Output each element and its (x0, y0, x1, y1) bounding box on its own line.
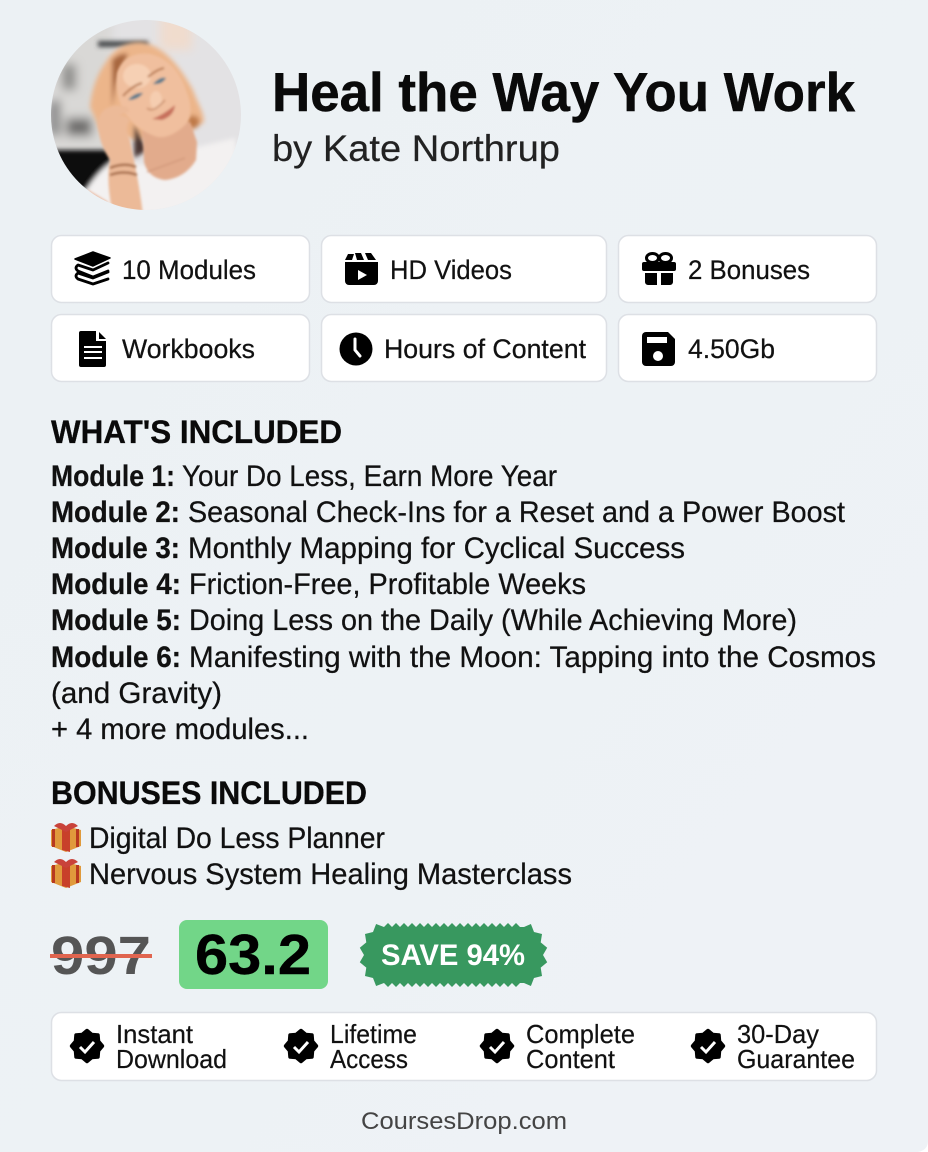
heading: what's included: WHAT'S INCLUDED (51, 414, 342, 450)
hair (90, 42, 204, 158)
guarantee: 30-day guarantee: 30-Day (737, 1019, 819, 1049)
module list: Module 2: (51, 496, 180, 529)
module list: Module 4: (51, 568, 181, 601)
footer site name: CoursesDrop.com (361, 1108, 567, 1135)
new price: 63.2 (195, 923, 311, 987)
module list: Monthly Mapping for Cyclical Success (188, 532, 685, 565)
portrait photo (50, 15, 245, 215)
heading: bonuses included: BONUSES INCLUDED (51, 775, 367, 811)
guarantee: complete content: Complete (526, 1019, 635, 1049)
module list: Module 3: (51, 532, 180, 565)
guarantee: lifetime access (286, 1019, 417, 1074)
guarantee: instant download: Instant (116, 1019, 194, 1049)
guarantee: instant download: Download (116, 1044, 227, 1074)
guarantee bar (52, 1012, 876, 1080)
module list: Seasonal Check-Ins for a Reset and a Power Boost (188, 496, 846, 529)
module list: Module 5: (51, 604, 181, 637)
feature card: workbooks (52, 314, 310, 382)
guarantee: 30-day guarantee: Guarantee (737, 1044, 855, 1074)
module list: Doing Less on the Daily (While Achieving More) (189, 604, 797, 637)
guarantee: complete content: Content (526, 1044, 616, 1074)
bonus 2: Nervous System Healing Masterclass (89, 858, 572, 891)
module list: Manifesting with the Moon: Tapping into the Cosmos (189, 641, 876, 674)
feature card: workbooks: Workbooks (122, 334, 255, 364)
module list: + 4 more modules... (51, 713, 309, 746)
module list: Module 1: (51, 460, 175, 493)
guarantee: 30-day guarantee (692, 1019, 855, 1074)
module list: (and Gravity) (51, 677, 222, 710)
module list: Friction-Free, Profitable Weeks (189, 568, 586, 601)
module list (51, 460, 876, 746)
feature card: hours: Hours of Content (384, 334, 586, 364)
feature card: hours (322, 314, 606, 382)
feature card: modules: 10 Modules (122, 255, 256, 285)
title: Heal the Way You Work (272, 61, 855, 123)
old price: 997 (51, 926, 151, 986)
module list: Your Do Less, Earn More Year (182, 460, 557, 493)
guarantee: lifetime access: Access (330, 1044, 408, 1074)
guarantee: instant download (72, 1019, 227, 1074)
new price (179, 920, 328, 989)
feature card: bonuses: 2 Bonuses (688, 255, 810, 285)
subtitle: by Kate Northrup (272, 128, 560, 169)
neck, chest and face (117, 54, 197, 180)
feature card: size (618, 314, 876, 382)
save badge: SAVE 94% (381, 939, 525, 972)
guarantee: complete content (482, 1019, 635, 1074)
save badge (360, 923, 547, 987)
feature card: videos (322, 236, 606, 302)
feature card: videos: HD Videos (390, 255, 512, 285)
feature card: size: 4.50Gb (688, 334, 775, 364)
feature card: bonuses (618, 236, 876, 302)
bonus 1: Digital Do Less Planner (89, 822, 385, 855)
hand and arm (84, 106, 143, 215)
guarantee: lifetime access: Lifetime (330, 1019, 417, 1049)
feature card: modules (52, 236, 310, 302)
module list: Module 6: (51, 641, 181, 674)
